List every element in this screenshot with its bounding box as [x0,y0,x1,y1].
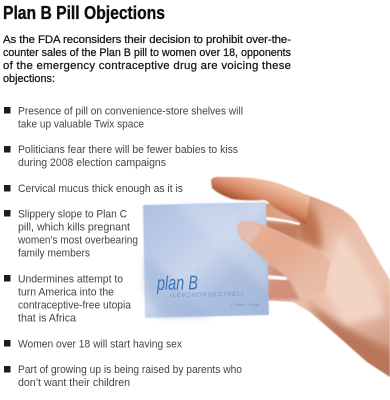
objection items: Presence of pill on convenience-store shelves will [18,106,243,118]
objection items: Part of growing up is being raised by parents who [18,364,242,376]
objection items: don’t want their children [18,377,130,389]
bullet list [4,106,243,389]
thumb [237,221,330,296]
objection items: Cervical mucus thick enough as it is [18,183,183,195]
intro paragraph: As the FDA reconsiders their decision to prohibit over-the- [3,34,291,46]
objection items: turn America into the [18,286,114,298]
intro paragraph [3,34,291,85]
intro paragraph: objections: [3,73,55,85]
objection items: take up valuable Twix space [18,118,144,130]
hand: palm and wrist [262,195,390,385]
objection items: that is Africa [18,312,77,324]
card drug name: (LEVONORGESTREL) [170,292,243,299]
hand holding card [143,177,390,385]
bullet markers [4,107,10,372]
intro paragraph: counter sales of the Plan B pill to women over 18, opponents [3,47,291,59]
objection items [17,106,243,389]
thumbnail [238,222,261,243]
intro paragraph: of the emergency contraceptive drug are voicing these [3,60,291,72]
finger gaps [266,217,300,225]
objection items: during 2008 election campaigns [18,157,166,169]
objection items: Women over 18 will start having sex [18,338,182,350]
objection items: Slippery slope to Plan C [18,208,127,220]
objection items: pill, which kills pregnant [18,222,131,234]
objection items: contraceptive-free utopia [18,300,132,312]
index finger [211,177,310,225]
objection items: women’s most overbearing [17,234,138,246]
objection items: Undermines attempt to [18,274,123,286]
card: plan B package [143,202,269,318]
card dosage: (1 tablet, 0.75 mg) [231,303,259,307]
title: Plan B Pill Objections [3,2,165,23]
objection items: Politicians fear there will be fewer babies to kiss [18,144,238,156]
card logo: plan B: plan B [156,272,198,295]
objection items: family members [18,248,90,260]
